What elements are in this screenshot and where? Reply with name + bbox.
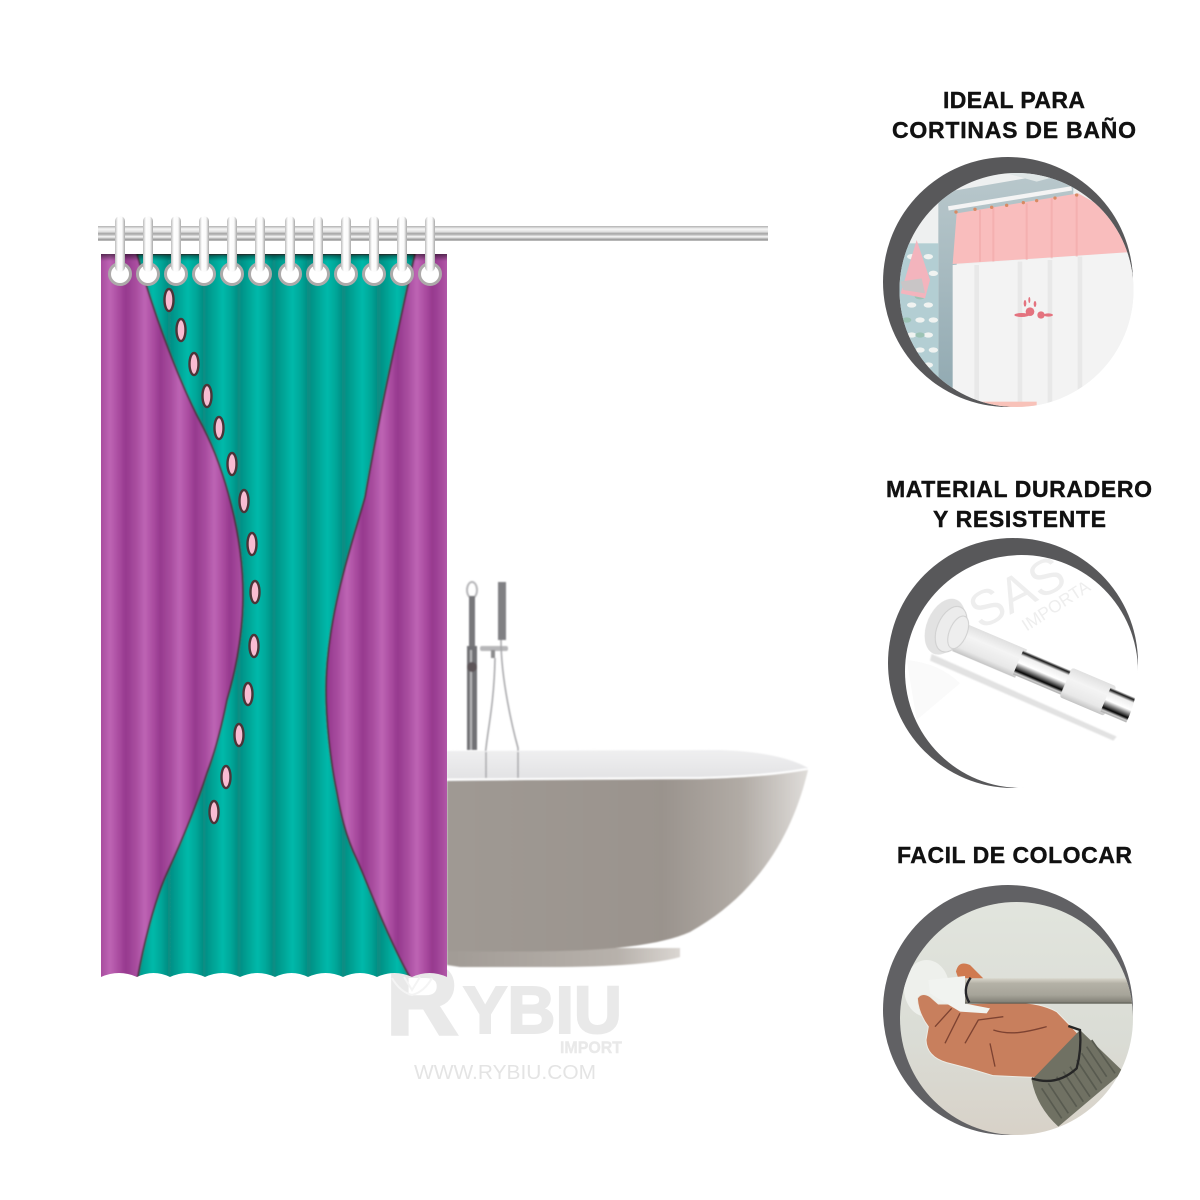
watermark: RYBIU logo: WWW.RYBIU.COM (414, 1062, 596, 1084)
grey ring (883, 157, 1133, 407)
grey ring (888, 538, 1138, 788)
scalloped tiles (898, 243, 938, 383)
watermark: RYBIU logo (386, 944, 623, 1084)
bottom pink band (982, 402, 1037, 407)
heading: material duradero y resistente: Y RESISTENTE (933, 506, 1106, 532)
faint watermark: IMPORTA (1018, 576, 1094, 635)
rod (952, 625, 1135, 722)
tub rim (447, 750, 808, 781)
grey ring (883, 885, 1133, 1135)
wall (938, 170, 1073, 390)
floor shadow (930, 654, 1117, 741)
white lower curtain (953, 252, 1137, 410)
faint watermark: SAS (960, 544, 1074, 640)
row of pink beads (164, 289, 260, 823)
hand (917, 995, 1079, 1078)
flange (924, 598, 970, 655)
sweater sleeve (1032, 1030, 1123, 1127)
towel (901, 240, 930, 298)
dark cuff (1032, 1026, 1080, 1081)
circle photo: hand fitting rod (883, 885, 1140, 1140)
magenta fabric right (326, 254, 447, 977)
suction base (904, 960, 949, 1017)
faucet and hand shower (467, 582, 518, 778)
embroidery (1014, 297, 1053, 319)
curtain hooks and rings (110, 216, 440, 284)
heading: ideal para cortinas de baño (892, 87, 1136, 143)
magenta fabric left (101, 254, 244, 977)
teal centre panel (137, 254, 415, 982)
heading: material duradero y resistente (886, 476, 1152, 532)
heading: facil de colocar: FACIL DE COLOCAR (897, 842, 1132, 868)
pink upper curtain (953, 193, 1137, 264)
watermark: RYBIU logo: R (386, 944, 458, 1056)
heading: ideal para cortinas de baño: IDEAL PARA (943, 87, 1085, 113)
watermark: leaf emblem over hem (392, 977, 432, 995)
circle photo: tension rod (888, 538, 1149, 795)
faint watermark (971, 558, 1092, 630)
curtain rod (98, 226, 768, 241)
rod (965, 978, 1138, 1004)
shower curtain (96, 250, 452, 985)
watermark: RYBIU logo: IMPORT (560, 1038, 623, 1057)
heading: material duradero y resistente: MATERIAL DURADERO (886, 476, 1152, 502)
bathtub (447, 750, 808, 967)
white fitting (946, 976, 990, 1014)
top shadow (101, 254, 447, 262)
heading: ideal para cortinas de baño: CORTINAS DE BAÑO (892, 116, 1136, 143)
finger creases (935, 1008, 1047, 1067)
tub base (447, 948, 680, 967)
top finger (956, 963, 983, 978)
circle photo: pink and white curtain (883, 157, 1140, 410)
rod and rings (948, 188, 1072, 208)
watermark: RYBIU logo: YBIU (463, 973, 622, 1048)
tub body (447, 770, 808, 952)
